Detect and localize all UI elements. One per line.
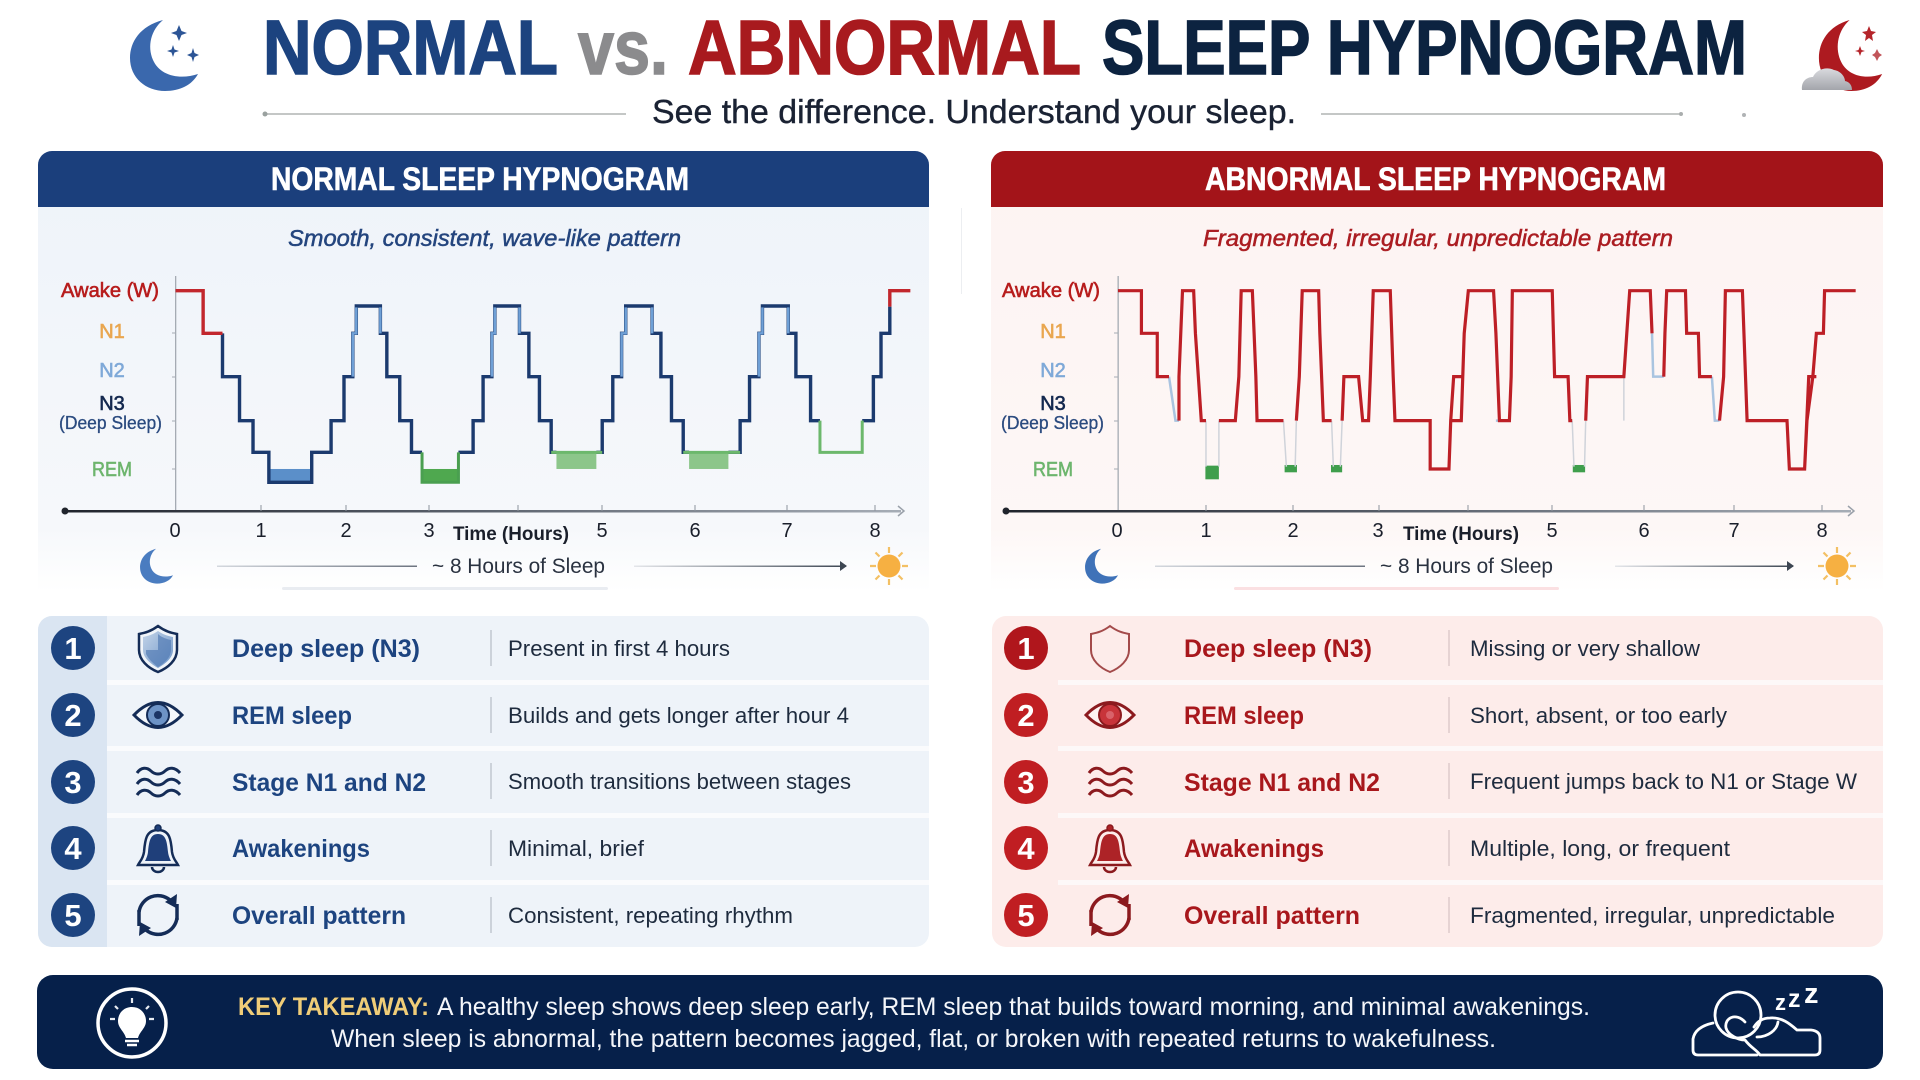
row 1: deep sleep: Deep sleep (N3) — [232, 635, 420, 663]
title: ABNORMAL — [688, 5, 1081, 91]
stage labels: Awake (W) — [1002, 280, 1100, 302]
normal hypnogram chart: Time (Hours) — [453, 523, 569, 545]
abnormal hypnogram chart — [1002, 276, 1856, 545]
panel: abnormal sleep hypnogram — [991, 151, 1883, 592]
title — [263, 5, 1747, 91]
sleep duration bar: ~ 8 Hours of Sleep — [1380, 555, 1553, 578]
row 5: overall pattern — [51, 893, 793, 937]
icon: cycle arrows — [139, 894, 177, 936]
takeaway text: KEY TAKEAWAY: — [238, 993, 429, 1021]
row 5: overall pattern: Fragmented, irregular, unpredictable — [1470, 903, 1835, 928]
stage labels: REM — [92, 459, 132, 481]
normal hypnogram chart: 1 — [255, 520, 267, 542]
abnormal hypnogram chart: 7 — [1728, 520, 1740, 542]
stage labels: N2 — [99, 360, 125, 382]
icon: bell — [1090, 825, 1130, 872]
sleep duration bar — [140, 547, 908, 585]
title: SLEEP HYPNOGRAM — [1102, 5, 1747, 91]
icon: small moon — [1085, 549, 1118, 584]
panel header: NORMAL SLEEP HYPNOGRAM — [271, 161, 689, 197]
zzz sleep letters — [1775, 978, 1818, 1015]
row 5: overall pattern: Consistent, repeating rhythm — [508, 903, 793, 928]
abnormal hypnogram chart: Time (Hours) — [1403, 523, 1519, 545]
sleep duration bar: ~ 8 Hours of Sleep — [432, 555, 605, 578]
row 3: stage N1 and N2 — [51, 760, 851, 804]
panel header — [38, 151, 929, 207]
zzz sleep letters: z — [1804, 978, 1818, 1010]
icon: light bulb — [98, 989, 166, 1057]
row 4: awakenings — [1004, 825, 1730, 872]
icon: eye — [134, 702, 182, 728]
icon: empty shield — [1091, 626, 1129, 672]
row 3: stage N1 and N2: Stage N1 and N2 — [1184, 769, 1380, 797]
normal hypnogram chart: 7 — [781, 520, 793, 542]
row 5: overall pattern: Overall pattern — [1184, 902, 1360, 930]
sleep duration bar — [1085, 547, 1856, 585]
abnormal hypnogram chart: 0 — [1111, 520, 1123, 542]
row 2: REM sleep: 2 — [64, 698, 82, 733]
icon: sun — [1818, 547, 1856, 585]
row 2: REM sleep: Builds and gets longer after hour 4 — [508, 703, 849, 728]
row 4: awakenings: 4 — [64, 831, 82, 866]
icon: cycle arrows — [1091, 894, 1129, 936]
row 3: stage N1 and N2: Frequent jumps back to N1 or Stage W — [1470, 769, 1857, 794]
row 2: REM sleep: REM sleep — [232, 702, 352, 730]
stage labels: Awake (W) — [61, 280, 159, 302]
panel header: ABNORMAL SLEEP HYPNOGRAM — [1205, 161, 1666, 197]
row 5: overall pattern — [1004, 893, 1835, 937]
row 4: awakenings: Multiple, long, or frequent — [1470, 836, 1730, 861]
row 3: stage N1 and N2 — [1004, 760, 1857, 804]
icon: eye — [1086, 702, 1134, 728]
icon: shield — [139, 626, 177, 672]
icon: sun — [870, 547, 908, 585]
stage labels — [59, 280, 162, 481]
normal hypnogram chart: 0 — [169, 520, 181, 542]
row 3: stage N1 and N2: Smooth transitions between stages — [508, 769, 851, 794]
panel: normal comparison table — [38, 616, 929, 947]
row 2: REM sleep: Short, absent, or too early — [1470, 703, 1727, 728]
stage labels: N1 — [1040, 321, 1066, 343]
row 5: overall pattern: 5 — [1017, 898, 1035, 933]
normal hypnogram chart: 3 — [423, 520, 435, 542]
icon: red moon with cloud — [1802, 20, 1882, 91]
row 4: awakenings: 4 — [1017, 831, 1035, 866]
stage labels: N3 — [1040, 393, 1066, 415]
normal hypnogram chart: 5 — [596, 520, 608, 542]
row 1: deep sleep: 1 — [1017, 631, 1035, 666]
icon: waves — [137, 768, 180, 796]
stage labels — [1001, 280, 1104, 481]
title: vs. — [578, 6, 668, 91]
icon: waves — [1089, 768, 1132, 796]
zzz sleep letters: z — [1775, 990, 1786, 1015]
row 1: deep sleep: Missing or very shallow — [1470, 636, 1700, 661]
panel: abnormal comparison table — [992, 616, 1883, 947]
row 3: stage N1 and N2: Stage N1 and N2 — [232, 769, 426, 797]
row 4: awakenings: Minimal, brief — [508, 836, 645, 861]
row 1: deep sleep: 1 — [64, 631, 82, 666]
row 2: REM sleep: REM sleep — [1184, 702, 1304, 730]
stage labels: (Deep Sleep) — [1001, 412, 1104, 433]
icon: sleeping figure on cloud — [1693, 992, 1820, 1055]
normal hypnogram chart: 6 — [689, 520, 701, 542]
abnormal hypnogram chart: 5 — [1546, 520, 1558, 542]
normal hypnogram chart: 8 — [869, 520, 881, 542]
icon: small moon — [140, 549, 173, 584]
panel header — [991, 151, 1883, 207]
row 5: overall pattern: 5 — [64, 898, 82, 933]
icon: blue moon with stars — [130, 20, 199, 91]
row 2: REM sleep — [1004, 693, 1727, 737]
row 1: deep sleep: Present in first 4 hours — [508, 636, 730, 661]
takeaway text: A healthy sleep shows deep sleep early, REM sleep that builds toward morning, and minimal awakenings. — [437, 993, 1590, 1021]
abnormal hypnogram chart: 2 — [1287, 520, 1299, 542]
key takeaway banner — [37, 975, 1883, 1069]
panel: normal sleep hypnogram — [38, 151, 929, 592]
normal hypnogram chart: 2 — [340, 520, 352, 542]
normal hypnogram chart — [62, 276, 910, 545]
row 3: stage N1 and N2: 3 — [64, 765, 82, 800]
row 4: awakenings: Awakenings — [232, 835, 370, 863]
abnormal hypnogram chart: 1 — [1200, 520, 1212, 542]
row 1: deep sleep — [1004, 626, 1700, 672]
panel tagline: Fragmented, irregular, unpredictable pattern — [1203, 225, 1673, 251]
icon: bell — [138, 825, 178, 872]
row 1: deep sleep — [51, 626, 730, 672]
subtitle: See the difference. Understand your sleep. — [652, 93, 1296, 130]
panel tagline: Smooth, consistent, wave-like pattern — [288, 225, 681, 251]
takeaway text — [238, 993, 1590, 1053]
row 4: awakenings: Awakenings — [1184, 835, 1324, 863]
abnormal hypnogram chart: 6 — [1638, 520, 1650, 542]
row 1: deep sleep: Deep sleep (N3) — [1184, 635, 1372, 663]
abnormal hypnogram chart: 8 — [1816, 520, 1828, 542]
zzz sleep letters: z — [1788, 985, 1800, 1013]
row 2: REM sleep: 2 — [1017, 698, 1035, 733]
row 2: REM sleep — [51, 693, 849, 737]
stage labels: (Deep Sleep) — [59, 412, 162, 433]
row 3: stage N1 and N2: 3 — [1017, 765, 1035, 800]
title: NORMAL — [263, 5, 558, 91]
row 4: awakenings — [51, 825, 645, 872]
takeaway text: When sleep is abnormal, the pattern becomes jagged, flat, or broken with repeated returns to wakefulness. — [331, 1025, 1496, 1053]
stage labels: N2 — [1040, 360, 1066, 382]
stage labels: N3 — [99, 393, 125, 415]
abnormal hypnogram chart: 3 — [1372, 520, 1384, 542]
row 5: overall pattern: Overall pattern — [232, 902, 406, 930]
stage labels: REM — [1033, 459, 1073, 481]
stage labels: N1 — [99, 321, 125, 343]
